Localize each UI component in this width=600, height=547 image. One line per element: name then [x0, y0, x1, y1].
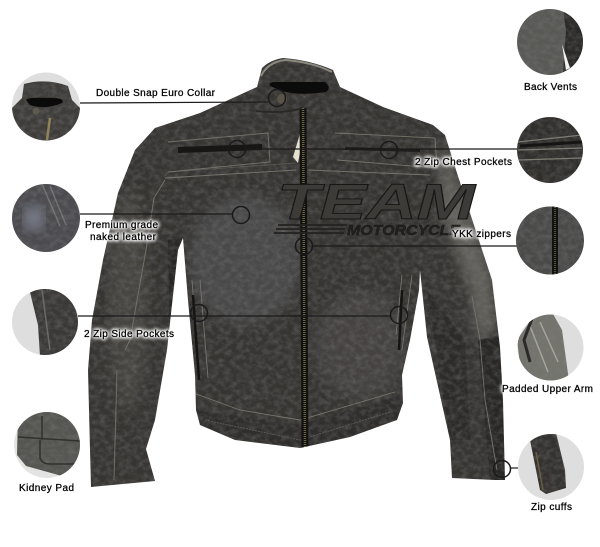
- detail circle: kidney pad: [14, 412, 80, 478]
- callout lines and markers: [78, 90, 518, 478]
- chest pocket left: [178, 144, 262, 153]
- label: back vents: Back Vents: [524, 82, 577, 93]
- label: leather: naked leather: [90, 232, 157, 243]
- watermark logo: MOTORCYCLE: [347, 222, 461, 239]
- detail circle: zip cuffs: [518, 434, 584, 500]
- collar opening: [270, 82, 329, 94]
- centre zipper: [303, 108, 305, 448]
- collar snap: [277, 94, 287, 104]
- detail circle: chest pockets: [517, 117, 583, 183]
- detail circle: back vents: [517, 9, 583, 75]
- label: YKK: YKK zippers: [452, 229, 511, 240]
- inner shirt: [293, 134, 300, 163]
- label: padded upper arm: Padded Upper Arm: [502, 384, 593, 395]
- watermark logo: [274, 174, 477, 239]
- detail circle: side pockets: [12, 289, 78, 355]
- label: kidney pad: Kidney Pad: [19, 483, 74, 494]
- detail circle: naked leather: [12, 184, 80, 252]
- detail circle: collar: [12, 72, 80, 140]
- label: chest pockets: 2 Zip Chest Pockets: [415, 157, 512, 168]
- seams: [114, 133, 497, 480]
- label: side pockets: 2 Zip Side Pockets: [84, 329, 174, 340]
- label: leather: Premium grade: [85, 220, 158, 231]
- label: leather: [85, 220, 158, 243]
- watermark logo: TEAM: [277, 174, 477, 230]
- side pockets: [193, 290, 402, 380]
- detail circle: YKK zippers: [516, 206, 584, 274]
- chest pocket right: [345, 147, 420, 152]
- label: collar: Double Snap Euro Collar: [96, 88, 216, 99]
- jacket: [80, 50, 510, 495]
- label: zip cuffs: Zip cuffs: [531, 502, 572, 513]
- detail circle: padded upper arm: [518, 314, 584, 380]
